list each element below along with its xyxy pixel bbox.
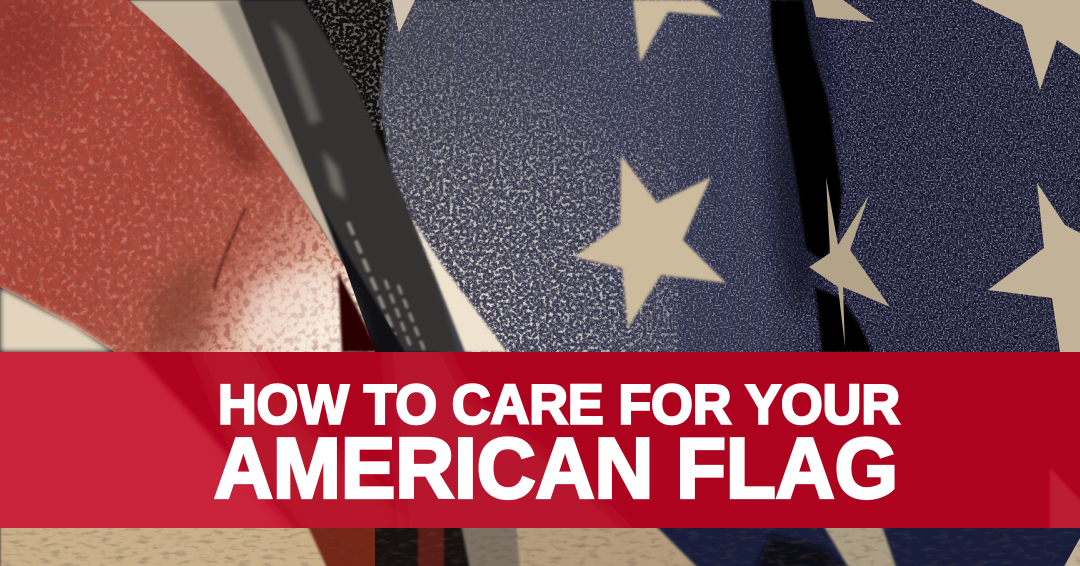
panel: black vertical fold lower [815,287,872,352]
banner [0,352,1080,528]
panel: stripe gray shading [215,0,316,195]
banner fold accent [1050,470,1080,528]
banner lower light panel [383,352,630,528]
upper fold highlight [272,20,322,125]
panel: navy speckle [378,0,1080,352]
title line 2: AMERICAN FLAG [214,422,898,516]
panel: red stripe [0,0,400,352]
strip: mid cream [514,528,698,566]
panel: warm lit speckle [378,0,678,352]
panel: strip below banner [0,528,1080,566]
red dark texture [0,0,400,352]
panel: red shading [0,0,400,352]
banner mid light panel [192,352,406,528]
strip: texture [0,528,1080,566]
panel: navy canton [378,0,1080,566]
strip: dark shadow [755,535,845,566]
title [214,372,900,516]
icon: folded star [809,177,890,347]
upper edge red shadow [160,30,270,170]
panel: lit fabric glow [232,262,362,352]
bottom fold highlight [385,280,425,352]
banner left light panel [0,352,294,528]
strip: dark red [306,528,375,566]
panel: dark diagonal fold [238,0,458,352]
icon: top star [633,0,724,63]
lower red shadow [150,250,210,352]
panel: black area beside fold [305,0,432,268]
icon: top middle star [812,0,874,22]
strip: red streak [418,520,444,566]
middle fold highlight [322,150,346,200]
panel: shadow band beside black fold [770,0,830,310]
strip: corner star [1064,538,1080,566]
icon: small top star [392,0,415,33]
panel: black vertical fold upper [770,0,842,262]
strip: left cream [0,528,328,566]
lower fold highlight [348,222,395,335]
strip: black [375,528,380,566]
panel: navy dark speckle [378,0,1080,352]
icon: upper right star [971,0,1080,90]
top left red shadow [0,0,75,100]
strip: lower star [822,528,898,566]
red crease [214,208,245,290]
icon: central star [574,155,726,328]
strip: navy [658,528,1080,566]
red pink texture [0,0,355,352]
strip: gray fold [460,528,521,566]
panel: white stripe right of fold [412,218,507,352]
panel: black area grain [305,0,395,130]
panel: fold highlights [272,20,425,352]
panel: cream stripe upper [128,0,345,270]
title line 1: HOW TO CARE FOR YOUR [218,372,900,436]
panel: lower cream stripe [0,287,114,352]
panel: dark red shadow [338,272,378,352]
icon: right star [988,183,1080,352]
